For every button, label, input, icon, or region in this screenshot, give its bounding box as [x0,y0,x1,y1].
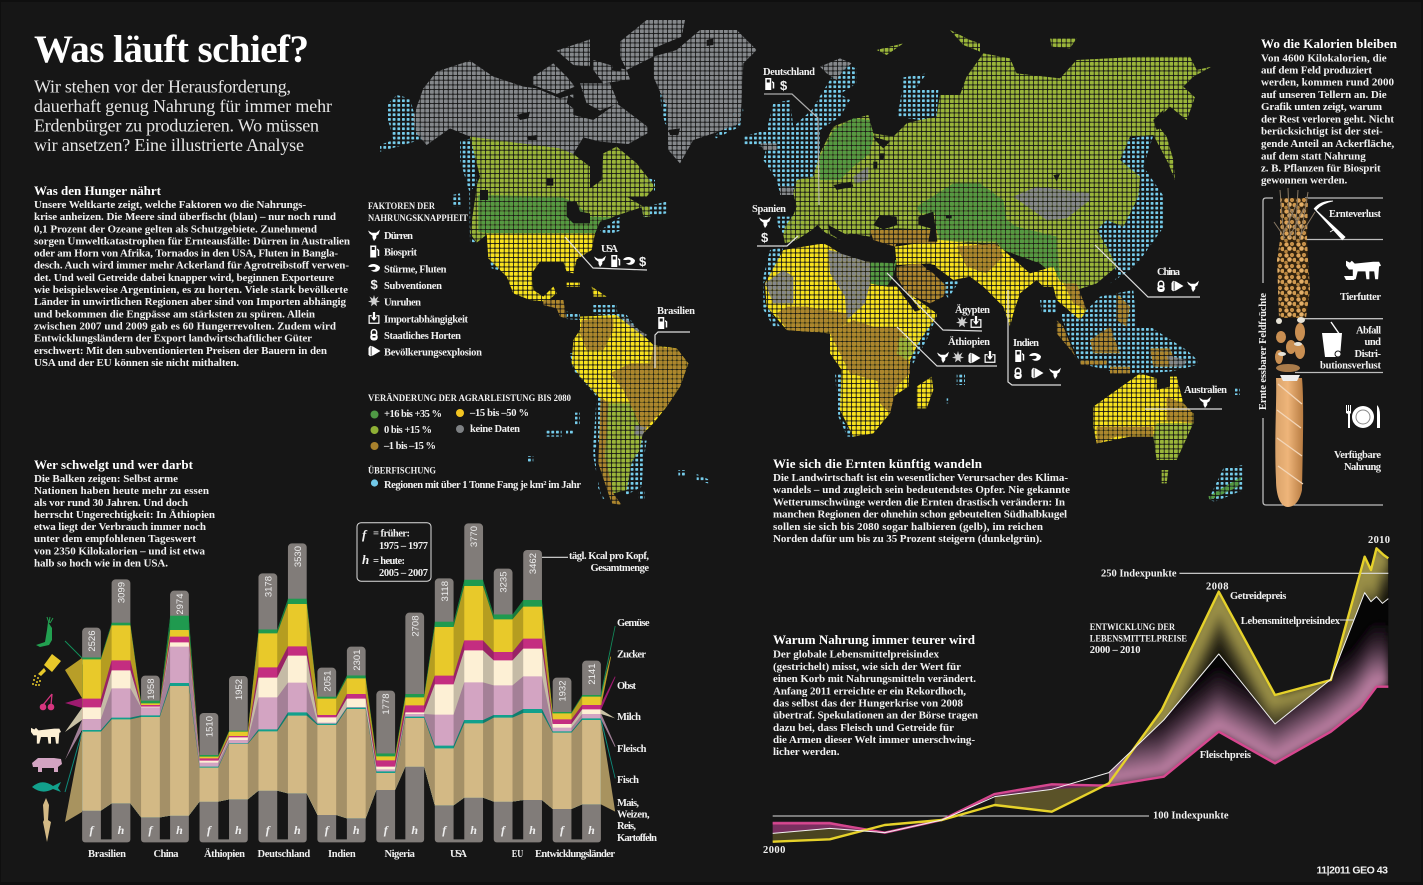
icon: plate and cutlery [1346,405,1380,428]
key box f and h: = heute: [373,556,405,567]
food group labels: Zucker [617,650,646,660]
text block: Was den Hunger nährt: zwischen 2007 und 2009 gab es 60 Hungerrevolten. Zudem wird [34,320,336,332]
graphic: calories from field to food [1258,188,1383,507]
reference line 250 [1179,572,1388,574]
text block: Was den Hunger nährt: oder am Horn von Afrika, Tornados in den USA, Fluten in Bangla- [34,248,338,260]
food group labels: Mais, [617,798,639,809]
text block: Wo die Kalorien bleiben: auf dem statt Nahrung [1261,150,1366,162]
bar totals: 2141 [587,664,598,685]
stacked bars and connecting bands [82,500,615,843]
country labels: USA [450,849,467,860]
text block: Warum Nahrung immer teurer wird: übertraf. Spekulationen an der Börse tragen [773,710,978,722]
food group labels: Weizen, [617,810,650,820]
bar totals: 1958 [146,678,157,700]
grains [1277,198,1310,318]
bar type letters: h [176,823,183,837]
text block: Wer schwelgt und wer darbt: Die Balken zeigen: Selbst arme [34,473,178,485]
crumbs [1275,317,1305,372]
stalks [1274,188,1315,240]
legend: Faktoren der Nahrungsknappheit: NAHRUNGSKNAPPHEIT [368,213,469,224]
left fans to icons [65,641,82,822]
callout: Deutschland [763,67,819,205]
food group labels: Obst [617,681,636,692]
legend: Faktoren der Nahrungsknappheit: Importabhängigkeit [384,314,468,325]
text block: Wo die Kalorien bleiben: auf dem Feld produziert [1261,64,1372,76]
intro text: wir ansetzen? Eine illustrierte Analyse [34,135,304,155]
bar type letters: f [560,823,565,837]
callout: Spanien [752,204,798,246]
text block: Was den Hunger nährt: krise anheizen. Die Meere sind überfischt (blau) – nur noch rund [34,211,336,223]
intro text: Erdenbürger zu produzieren. Wo müssen [34,116,319,136]
callout: Australien [1145,385,1227,409]
food group labels: Milch [617,712,641,723]
cereal price glow [1108,550,1388,781]
text block: Wo die Kalorien bleiben: Grafik unten zeigt, warum [1261,101,1382,113]
callout: Australien: Australien [1184,385,1227,396]
icon: carrot [36,617,53,647]
text block: Warum Nahrung immer teurer wird: licher werden. [773,746,840,758]
callout: USA: $ [639,254,647,269]
key box f and h: 1975 – 1977 [379,541,428,552]
world map: Eurasia, Africa and Australia [743,30,1243,502]
icon: pig [32,758,62,772]
total kcal note [542,551,649,574]
chart labels: 2000 – 2010 [1090,645,1140,656]
text block: Wo die Kalorien bleiben: der Rest verloren geht. Nicht [1261,113,1394,125]
bar type letters [90,823,595,837]
country labels: Deutschland [258,849,310,860]
icon: fish [32,782,61,792]
bar type letters: f [90,823,94,837]
callout: Deutschland: Deutschland [763,67,815,78]
legend: Überfischung: Regionen mit über 1 Tonne Fang je km² im Jahr [384,480,581,491]
icon: cherries [40,694,54,710]
text block: Warum Nahrung immer teurer wird: die Armen dieser Welt immer unerschwing- [773,734,975,746]
label: Ernte essbarer Feldfrüchte: Ernte essbarer Feldfrüchte [1258,293,1269,410]
bar type letters: h [411,823,418,837]
dark area between price lines [1109,548,1388,786]
text block: Wie sich die Ernten künftig wandeln: Norden dafür um bis zu 35 Prozent steigern (dunkelgrün). [773,533,1042,545]
label: Abfall und Distributionsverlust: Distri- [1354,349,1382,360]
reference line 100 [773,815,1149,817]
text block: Wo die Kalorien bleiben: gewonnen werden. [1261,174,1348,186]
bar totals [87,526,598,737]
text block: Wo die Kalorien bleiben [1261,36,1398,186]
chart: food price development [763,535,1390,885]
text block: Wer schwelgt und wer darbt: etwa liegt der Verbrauch immer noch [34,521,206,533]
intro text [34,76,332,155]
country labels: Äthiopien [204,847,245,860]
food group labels [617,618,657,844]
callout: Indien [1008,290,1061,385]
text block: Warum Nahrung immer teurer wird: Warum Nahrung immer teurer wird [773,632,976,647]
text block: Wo die Kalorien bleiben: z. B. Pflanzen für Biosprit [1261,162,1381,174]
chart labels [763,535,1390,856]
label: Abfall und Distributionsverlust [1320,326,1382,372]
text block: Was den Hunger nährt: sorgen Umweltkatastrophen für Ernteausfälle: Dürren in Australien [34,235,350,247]
icon: scythe [1314,201,1345,240]
icon: waste bin [1322,322,1342,357]
text block: Wo die Kalorien bleiben: werden, kommen rund 2000 [1261,77,1394,89]
callout: Indien: Indien [1013,338,1039,349]
country labels: Entwicklungsländer [535,849,615,860]
meat price glow [1108,628,1388,784]
legend: Faktoren der Nahrungsknappheit: Bevölkerungsexplosion [384,348,482,359]
text block: Wie sich die Ernten künftig wandeln: sollen sie sich bis 2080 sogar halbieren (gelb), im reichen [773,521,1043,533]
label: Verfügbare Nahrung: Verfügbare [1334,450,1381,461]
food price index line [773,593,1388,833]
legend: Veränderung der Agrarleistung [368,391,571,452]
icon: wheat [43,798,51,842]
text block: Wie sich die Ernten künftig wandeln: Wetterumschwünge werden die Ernten drastisch verändern: In [773,496,1065,508]
baguette [1275,378,1303,507]
food group labels: Gemüse [617,618,650,629]
text block: Warum Nahrung immer teurer wird [773,632,978,758]
text block: Wie sich die Ernten künftig wandeln: manchen Regionen der ohnehin schon gebeutelten Südhalbkugel [773,509,1067,521]
callout: Brasilien [655,306,695,368]
bar totals: 2708 [410,616,422,637]
legend: Faktoren der Nahrungsknappheit: Subventionen [384,281,442,292]
bar totals: 1778 [381,694,392,715]
total kcal note: Gesamtmenge [590,563,649,574]
label: Abfall und Distributionsverlust: und [1364,337,1381,348]
bar totals: 2301 [352,650,363,671]
title: Was läuft schief? [34,28,309,71]
bar type letters: h [118,823,125,837]
chart: calories per capita by food group [31,456,1390,885]
text block: Wo die Kalorien bleiben: gende Anteil an Ackerfläche, [1261,138,1395,150]
text block: Wer schwelgt und wer darbt: als vor rund 30 Jahren. Und doch [34,497,188,509]
right fans to labels [601,626,615,812]
legend: Veränderung der Agrarleistung: +16 bis +35 % [384,409,442,420]
food group labels: Fisch [617,775,639,786]
text block: Was den Hunger nährt: desch. Auch wird immer mehr Ackerland für Agrotreibstoff verwen- [34,260,349,272]
bar type letters: h [235,823,242,837]
chart labels: Fleischpreis [1200,750,1251,761]
text block: Wer schwelgt und wer darbt [34,457,215,570]
text block: Was den Hunger nährt [34,183,350,369]
text block: Wie sich die Ernten künftig wandeln: Wie sich die Ernten künftig wandeln [773,456,983,471]
bar type letters: f [266,823,271,837]
callout: China [1095,245,1200,297]
chart labels: 250 Indexpunkte [1101,569,1177,580]
chart labels: 2010 [1368,535,1390,546]
text block: Was den Hunger nährt: USA und der EU können sie nicht mithalten. [34,357,239,369]
legend: Faktoren der Nahrungsknappheit: Staatliches Horten [384,331,461,342]
text block: Wer schwelgt und wer darbt: von 2350 Kilokalorien – und ist etwa [34,546,206,558]
label: Verfügbare Nahrung [1334,450,1382,473]
total kcal note: tägl. Kcal pro Kopf, [569,551,649,562]
text block: Wo die Kalorien bleiben: auf unseren Tellern an. Die [1261,89,1387,101]
chart labels: Lebensmittelpreisindex [1241,616,1341,627]
bar totals: 1932 [558,680,568,702]
label: Verfügbare Nahrung: Nahrung [1344,462,1382,473]
legend: Faktoren der Nahrungsknappheit: Dürren [384,231,413,242]
text block: Warum Nahrung immer teurer wird: Anfang 2011 erreichte er ein Rekordhoch, [773,685,966,697]
text block: Wie sich die Ernten künftig wandeln: wandels – und zugleich sein bedeutendstes Opfer. Nie gekannte [773,484,1070,496]
text block: Wie sich die Ernten künftig wandeln: Die Landwirtschaft ist ein wesentlicher Verursacher des Klima- [773,472,1068,484]
icon: cow feeding [1344,261,1381,280]
bar totals: 1952 [234,679,245,700]
legend: Überfischung: ÜBERFISCHUNG [368,463,436,476]
callout: Äthiopien [897,327,997,366]
bar type letters: h [353,823,360,837]
callout: Brasilien: Brasilien [657,306,695,317]
legend: Veränderung der Agrarleistung: VERÄNDERUNG DER AGRARLEISTUNG BIS 2080 [368,391,571,404]
country labels: China [154,849,179,860]
callout: Ägypten [887,273,990,331]
chart labels: 100 Indexpunkte [1153,811,1229,822]
bar type letters: h [588,823,595,837]
bar totals: 3530 [293,546,304,567]
legend: Faktoren der Nahrungsknappheit: FAKTOREN DER [368,201,436,212]
country labels [88,847,615,860]
bar totals: 3462 [528,553,539,574]
callout: USA [565,237,647,270]
chart labels: Getreidepreis [1230,591,1286,602]
chart labels: ENTWICKLUNG DER [1090,622,1176,633]
bar totals: 3099 [116,582,128,603]
bar type letters: f [501,823,506,837]
legend: Veränderung der Agrarleistung: –1 bis –15 % [383,441,436,452]
country labels: EU [512,849,524,860]
bar type letters: h [529,823,536,837]
legend: Faktoren der Nahrungsknappheit: Unruhen [384,298,421,309]
bar type letters: h [470,823,477,837]
bar type letters: f [325,823,330,837]
key box f and h: f [362,527,368,542]
label: Abfall und Distributionsverlust: butionsverlust [1320,360,1382,372]
food group labels: Kartoffeln [617,833,657,844]
bar totals: 3178 [264,576,274,597]
page number: 11|2011 GEO 43 [1316,864,1388,876]
callout: USA: USA [601,244,618,255]
icon: cow [31,728,61,744]
text block: Wer schwelgt und wer darbt: herrscht Ungerechtigkeit: In Äthiopien [34,508,215,521]
text block: Wer schwelgt und wer darbt: halb so hoch wie in den USA. [34,558,168,570]
text block: Warum Nahrung immer teurer wird: Der globale Lebensmittelpreisindex [773,649,940,661]
text block: Wie sich die Ernten künftig wandeln [773,456,1070,545]
food group labels: Reis, [617,821,636,832]
text block: Was den Hunger nährt: det. Und weil Getreide dabei knapper wird, beginnen Exporteure [34,272,334,284]
text block: Was den Hunger nährt: wie beispielsweise Argentinien, es zu horten. Viele stark bevölkerte [34,284,348,296]
bar totals: 2051 [322,670,334,692]
text block: Warum Nahrung immer teurer wird: dazu bei, dass Fleisch und Getreide für [773,722,954,734]
bar totals: 3235 [498,572,510,593]
text block: Was den Hunger nährt: Entwicklungsländern der Export landwirtschaftlicher Güter [34,333,312,345]
callout: Äthiopien: Äthiopien [948,335,990,348]
text block: Was den Hunger nährt: Was den Hunger nährt [34,183,162,198]
country labels: Indien [328,849,356,860]
text block: Wer schwelgt und wer darbt: Nationen haben heute mehr zu essen [34,485,209,497]
intro text: dauerhaft genug Nahrung für immer mehr [34,96,332,116]
chart labels: LEBENSMITTELPREISE [1090,634,1187,645]
legend: Faktoren der Nahrungsknappheit [368,201,482,359]
text block: Wer schwelgt und wer darbt: unter dem empfohlenen Tageswert [34,533,196,545]
text block: Wer schwelgt und wer darbt: Wer schwelgt und wer darbt [34,457,194,472]
callout: Spanien: $ [761,230,769,245]
key box f and h: = früher: [373,528,410,540]
intro text: Wir stehen vor der Herausforderung, [34,76,291,96]
callout: Deutschland: $ [780,78,788,93]
text block: Was den Hunger nährt: Unsere Weltkarte zeigt, welche Faktoren wo die Nahrungs- [34,199,306,211]
bar totals: 3770 [469,526,480,547]
food group labels: Fleisch [617,744,647,755]
key box f and h: 2005 – 2007 [379,568,428,579]
bar totals: 2974 [175,594,186,615]
label: Abfall und Distributionsverlust: Abfall [1356,326,1381,336]
bar type letters: f [442,823,447,837]
key box f and h: h [362,552,369,567]
icon: sugar shaker [32,654,61,686]
legend: Veränderung der Agrarleistung: keine Daten [470,424,520,435]
text block: Warum Nahrung immer teurer wird: das selbst das der Hungerkrise von 2008 [773,697,964,709]
callout: Ägypten: Ägypten [955,303,990,316]
bar type letters: h [294,823,301,837]
bar totals: 2526 [87,630,98,652]
text block: Warum Nahrung immer teurer wird: (gestrichelt) misst, wie sich der Wert für [773,661,961,673]
bar type letters: f [384,823,389,837]
text block: Was den Hunger nährt: und bekommen die Engpässe am stärksten zu spüren. Allein [34,308,315,320]
text block: Wo die Kalorien bleiben: berücksichtigt ist der stei- [1261,126,1383,138]
chart labels: 2008 [1206,582,1228,593]
country labels: Brasilien [88,849,126,860]
early period shading [773,783,1109,842]
legend: Veränderung der Agrarleistung: –15 bis –50 % [469,408,529,419]
text block: Was den Hunger nährt: erschwert: Mit den subventionierten Preisen der Bauern in den [34,345,327,357]
text block: Was den Hunger nährt: 0,1 Prozent der Ozeane gelten als Schutzgebiete. Zunehmend [34,223,317,235]
text block: Wo die Kalorien bleiben: Wo die Kalorien bleiben [1261,36,1398,51]
country labels: Nigeria [384,849,416,860]
world map: Americas and Greenland [380,20,757,505]
bar totals: 3118 [440,581,451,601]
legend: Faktoren der Nahrungsknappheit: Biosprit [384,248,418,259]
bar type letters: f [148,823,153,837]
cereal price line [773,548,1388,842]
meat price line [773,687,1388,833]
text block: Was den Hunger nährt: Länder in unwirtlichen Regionen aber sind von Importen abhängig [34,296,346,308]
callout: Spanien: Spanien [752,204,786,215]
text block: Warum Nahrung immer teurer wird: einen Korb mit Nahrungsmitteln verändert. [773,673,976,685]
text block: Wo die Kalorien bleiben: Von 4600 Kilokalorien, die [1261,52,1387,64]
bar type letters: f [207,823,212,837]
bar totals: 1510 [204,716,216,737]
chart labels: 2000 [763,845,785,856]
callout: China: China [1157,267,1181,278]
legend: Veränderung der Agrarleistung: 0 bis +15 % [384,425,432,436]
key box f and h [357,523,431,581]
legend: Faktoren der Nahrungsknappheit: $ [370,277,378,292]
legend: Faktoren der Nahrungsknappheit: Stürme, Fluten [384,264,447,275]
label: Tierfutter: Tierfutter [1340,292,1381,303]
legend: Überfischung [368,463,581,491]
label: Ernteverlust: Ernteverlust [1329,209,1382,220]
